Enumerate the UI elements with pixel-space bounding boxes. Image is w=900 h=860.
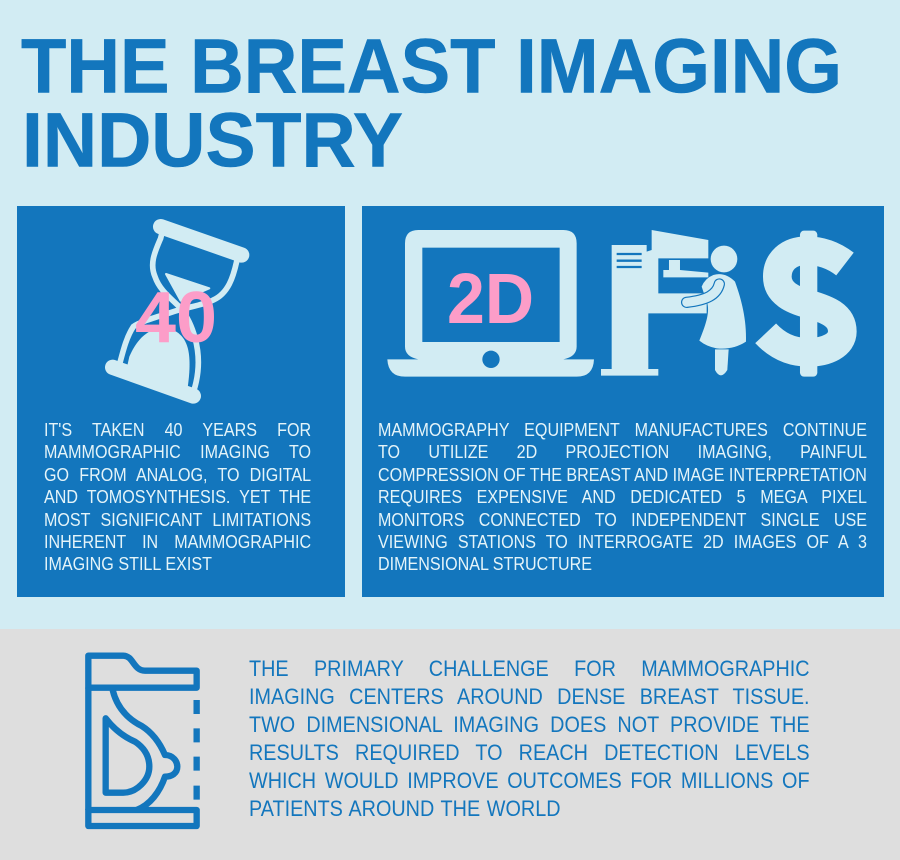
text: primary challenge copy: TWO DIMENSIONAL IMAGING DOES NOT PROVIDE THE (249, 712, 810, 737)
title (21, 24, 842, 184)
title: INDUSTRY (22, 98, 403, 184)
text: 2D equipment copy: MONITORS CONNECTED TO INDEPENDENT SINGLE USE (378, 509, 867, 530)
panel: 2D equipment (362, 206, 884, 597)
grey footer band (0, 629, 900, 860)
text: 2D equipment copy: COMPRESSION OF THE BREAST AND IMAGE INTERPRETATION (378, 464, 867, 485)
text: 2D equipment copy: VIEWING STATIONS TO INTERROGATE 2D IMAGES OF A 3 (378, 531, 867, 552)
text: 2D equipment copy: DIMENSIONAL STRUCTURE (378, 553, 592, 574)
panel: 40 years (17, 206, 345, 597)
text: primary challenge copy: THE PRIMARY CHALLENGE FOR MAMMOGRAPHIC (249, 656, 810, 681)
text: 40 years copy: AND TOMOSYNTHESIS. YET THE (44, 486, 311, 507)
text: primary challenge copy: WHICH WOULD IMPROVE OUTCOMES FOR MILLIONS OF (249, 768, 810, 793)
label: 2D: 2D (447, 260, 534, 339)
text: 2D equipment copy (378, 419, 867, 574)
text: 40 years copy: MAMMOGRAPHIC IMAGING TO (44, 441, 311, 462)
text: primary challenge copy: IMAGING CENTERS AROUND DENSE BREAST TISSUE. (249, 684, 810, 709)
label: 40: 40 (135, 278, 217, 358)
text: 2D equipment copy: MAMMOGRAPHY EQUIPMENT MANUFACTURES CONTINUE (378, 419, 867, 440)
text: 40 years copy: INHERENT IN MAMMOGRAPHIC (44, 531, 311, 552)
text: 2D equipment copy: REQUIRES EXPENSIVE AND DEDICATED 5 MEGA PIXEL (378, 486, 867, 507)
text: primary challenge copy (249, 656, 810, 821)
text: 40 years copy: GO FROM ANALOG, TO DIGITAL (44, 464, 311, 485)
text: 40 years copy (44, 419, 311, 574)
text: 40 years copy: MOST SIGNIFICANT LIMITATIONS (44, 509, 311, 530)
title: THE BREAST IMAGING (21, 24, 842, 110)
text: primary challenge copy: RESULTS REQUIRED TO REACH DETECTION LEVELS (249, 740, 810, 765)
text: 40 years copy: IMAGING STILL EXIST (44, 553, 212, 574)
text: 40 years copy: IT'S TAKEN 40 YEARS FOR (44, 419, 311, 440)
text: primary challenge copy: PATIENTS AROUND THE WORLD (249, 796, 561, 821)
text: 2D equipment copy: TO UTILIZE 2D PROJECTION IMAGING, PAINFUL (378, 441, 867, 462)
